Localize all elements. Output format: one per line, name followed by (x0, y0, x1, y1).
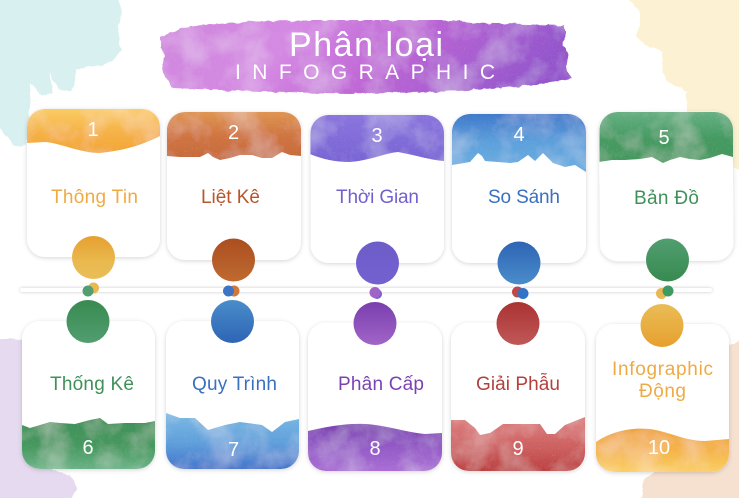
label: Phân Cấp (338, 374, 424, 395)
label: So Sánh (488, 187, 560, 208)
watercolor band 10 (596, 429, 729, 476)
watercolor band 9 (451, 417, 585, 475)
title banner (160, 20, 572, 94)
number 10: 10 (648, 437, 670, 459)
card 7: Quy Trình (166, 321, 299, 473)
label: Thông Tin (51, 187, 138, 208)
connector circles lower row (66, 300, 684, 347)
label: Liệt Kê (201, 187, 260, 208)
timeline line (20, 288, 712, 292)
card 2: Liệt Kê (167, 108, 301, 260)
label: Thời Gian (336, 187, 419, 208)
card 10: Infographic Động (596, 324, 729, 476)
watercolor band 4 (452, 110, 586, 172)
card 8: Phân Cấp (308, 322, 442, 475)
number 9: 9 (512, 438, 524, 460)
card 9: Giải Phẫu (451, 322, 585, 475)
card 5: Bản Đồ (599, 108, 734, 261)
watercolor band 8 (308, 424, 442, 475)
label: Giải Phẫu (476, 373, 560, 395)
watercolor band 2 (167, 108, 301, 160)
number 3: 3 (371, 125, 383, 147)
label: Động (639, 381, 686, 402)
watercolor band 6 (22, 418, 155, 473)
background wash: peach bottom right (640, 335, 739, 498)
card 6: Thống Kê (22, 321, 155, 473)
heading: Phân loại (289, 26, 443, 64)
label: Quy Trình (192, 374, 277, 395)
card 1: Thông Tin (27, 105, 160, 257)
timeline dots (82, 282, 674, 299)
label: Thống Kê (50, 374, 134, 395)
number 5: 5 (658, 127, 670, 149)
number 8: 8 (369, 438, 381, 460)
number 1: 1 (87, 119, 99, 141)
background wash: cyan top left (0, 0, 122, 146)
connector circles upper row (72, 236, 689, 284)
watercolor band 3 (310, 111, 444, 162)
card 3: Thời Gian (310, 111, 444, 263)
watercolor band 5 (599, 108, 733, 163)
number 6: 6 (82, 437, 94, 459)
number 2: 2 (228, 122, 239, 144)
watercolor band 7 (166, 413, 299, 473)
card 4: So Sánh (452, 110, 586, 263)
number 7: 7 (228, 439, 239, 461)
label: Infographic (612, 359, 713, 380)
number 4: 4 (513, 124, 525, 146)
watercolor band 1 (27, 105, 160, 153)
brush stroke (160, 20, 572, 94)
subheading: INFOGRAPHIC (235, 61, 495, 84)
label: Bản Đồ (634, 188, 699, 209)
background wash: lilac bottom left (0, 338, 77, 498)
label (612, 359, 713, 402)
background wash: yellow top right (622, 0, 739, 170)
